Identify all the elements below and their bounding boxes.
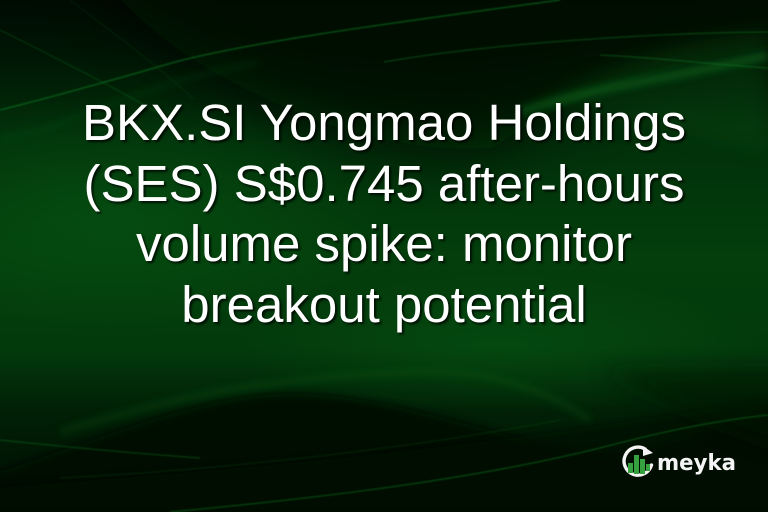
title: (SES) S$0.745 after-hours — [84, 155, 684, 212]
wordmark: meyka — [657, 451, 736, 476]
title: volume spike: monitor — [136, 215, 632, 272]
title: breakout potential — [181, 276, 587, 333]
icon: chart in circular arrow — [624, 446, 653, 475]
top right green area — [540, 32, 768, 150]
thin light streaks — [0, 0, 560, 110]
title: BKX.SI Yongmao Holdings — [82, 94, 686, 151]
wave highlights — [60, 372, 590, 432]
dark dome at bottom — [0, 394, 768, 512]
right side fall-off — [600, 370, 768, 450]
top dark mass — [60, 0, 768, 150]
logo: meyka — [622, 445, 736, 477]
title — [82, 94, 687, 336]
